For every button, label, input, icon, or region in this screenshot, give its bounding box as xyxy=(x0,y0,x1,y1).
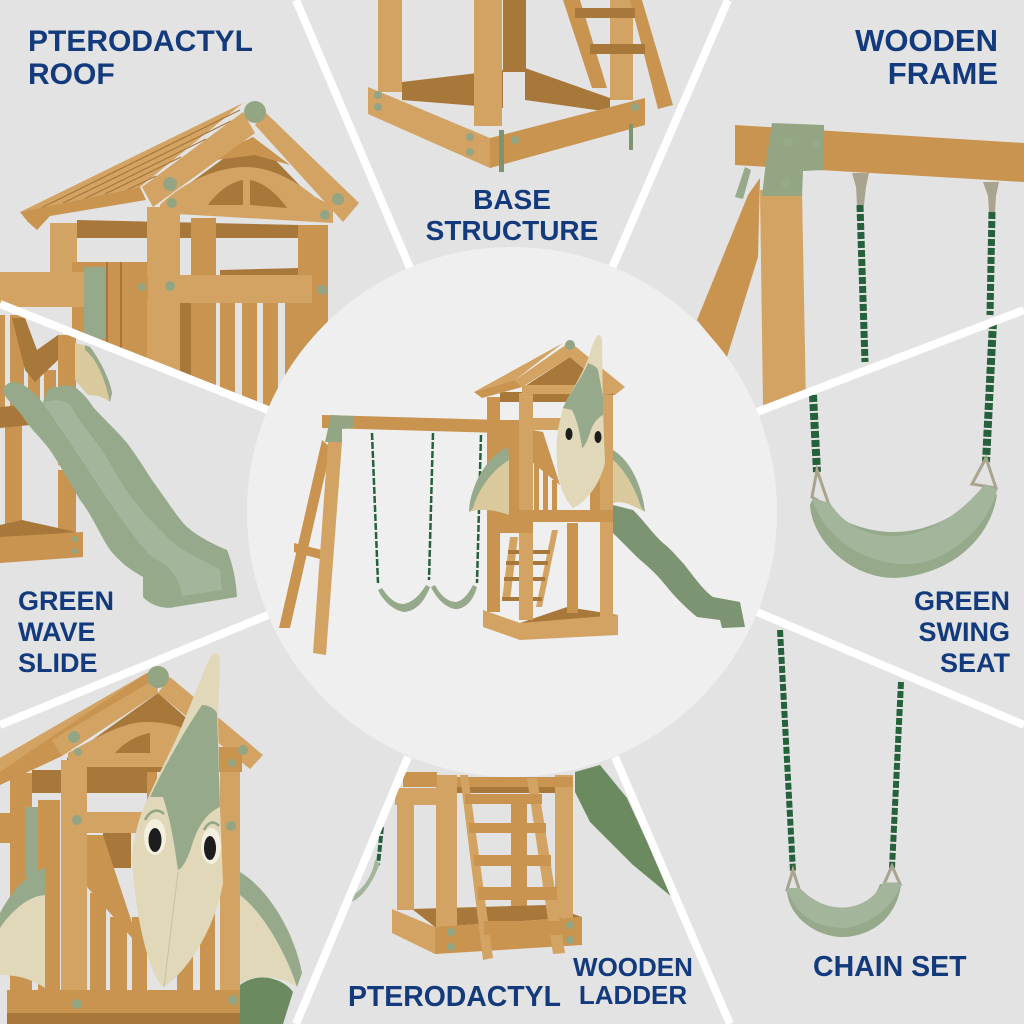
heading: pterodactyl roof: ROOF xyxy=(28,58,115,91)
heading: pterodactyl roof: PTERODACTYL xyxy=(28,25,253,58)
heading: green wave slide: SLIDE xyxy=(18,648,98,678)
panel: pterodactyl roof xyxy=(0,101,359,413)
heading: wooden frame: FRAME xyxy=(888,56,998,91)
swing frame xyxy=(279,415,502,655)
center circle with full playset xyxy=(247,247,777,777)
heading: base structure: STRUCTURE xyxy=(426,215,598,246)
panel: base structure xyxy=(368,0,673,172)
heading: chain set: CHAIN SET xyxy=(813,951,967,983)
heading: green wave slide: WAVE xyxy=(18,617,96,647)
pterodactyl figure xyxy=(469,335,645,515)
dinosaur face xyxy=(132,653,223,987)
panel: green swing seat xyxy=(810,322,997,578)
panel: wooden ladder xyxy=(350,765,673,960)
heading: wooden frame: WOODEN xyxy=(855,23,998,58)
panel: wooden frame xyxy=(697,123,1024,405)
tower xyxy=(474,340,625,640)
slide xyxy=(613,505,745,628)
heading: green swing seat: SWING xyxy=(918,617,1010,647)
heading: green wave slide: GREEN xyxy=(18,586,114,616)
heading: green swing seat: SEAT xyxy=(940,648,1010,678)
swing chains and seats xyxy=(372,433,481,612)
heading: wooden ladder: LADDER xyxy=(579,980,687,1010)
heading: base structure: BASE xyxy=(473,184,551,215)
right wing xyxy=(240,872,302,987)
panel: chain set xyxy=(780,630,901,937)
heading: pterodactyl: PTERODACTYL xyxy=(348,981,561,1013)
heading: green swing seat: GREEN xyxy=(914,586,1010,616)
panel: pterodactyl head xyxy=(0,653,302,1024)
panel: green wave slide xyxy=(0,315,237,608)
left wing xyxy=(0,868,46,988)
roof planks xyxy=(20,103,243,230)
heading: wooden ladder: WOODEN xyxy=(573,952,693,982)
